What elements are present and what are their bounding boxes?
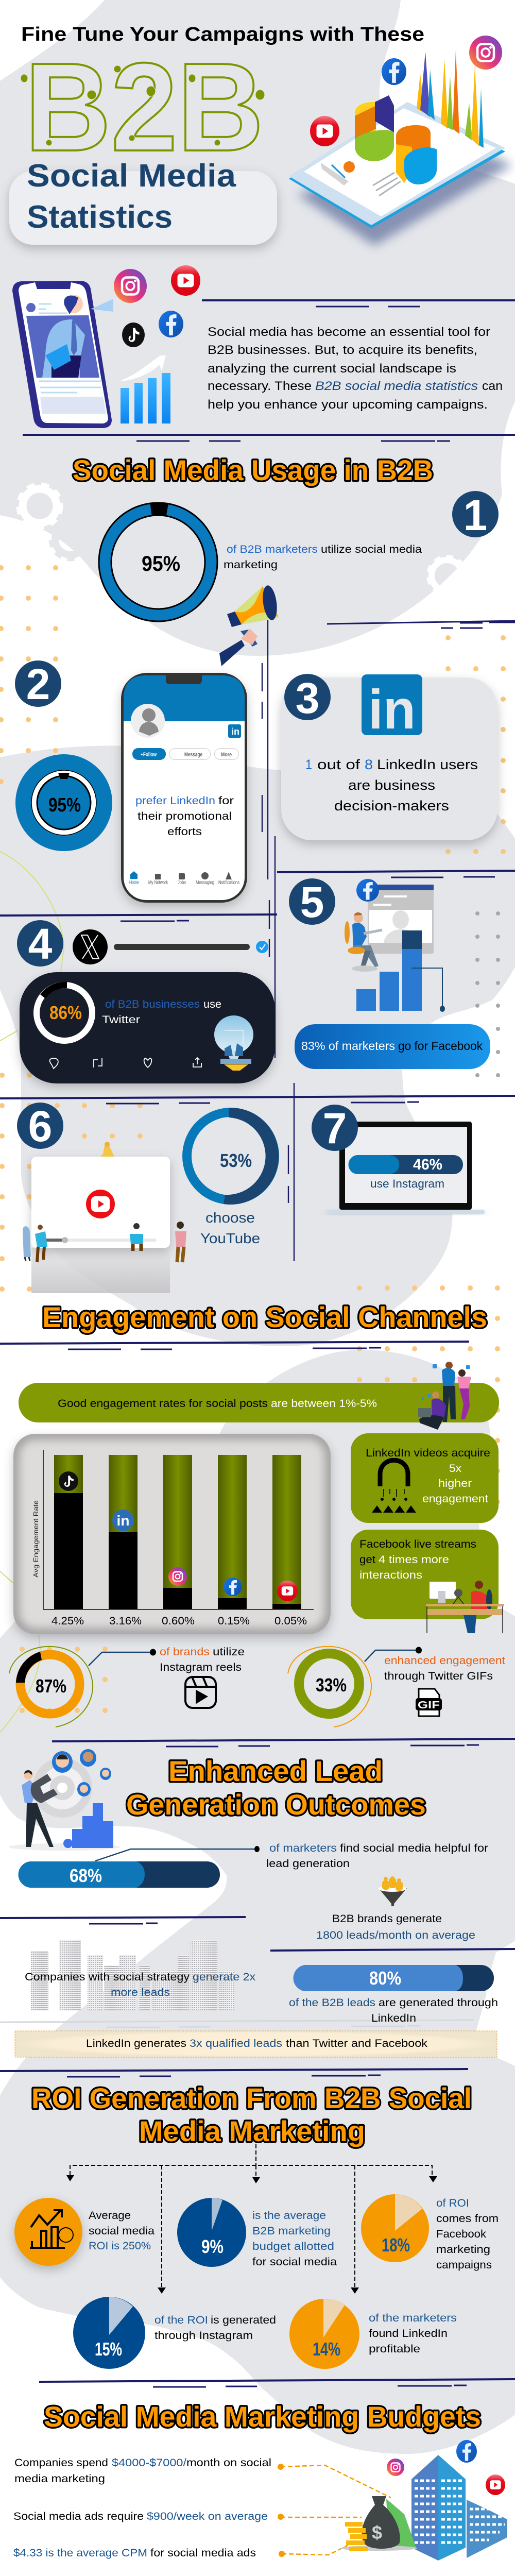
progress pill 46%: 46%	[413, 1156, 442, 1173]
panel text: out of	[317, 757, 360, 772]
panel: LinkedIn videos: 5x	[449, 1463, 462, 1475]
heading: ROI Generation From B2B Social Media Marketing: Media Marketing	[139, 2115, 365, 2147]
phone nav bar	[129, 871, 239, 886]
budget statements	[13, 2457, 271, 2559]
stat: 33% donut	[288, 1647, 371, 1727]
phone text: prefer LinkedIn	[135, 795, 215, 807]
stat: 18% Facebook pie: comes from	[436, 2213, 499, 2225]
stat: ROI 250%: Average	[89, 2210, 131, 2222]
panel text: 1	[305, 757, 312, 772]
dashed connector tree	[66, 2144, 437, 2294]
number 3	[284, 674, 331, 722]
panel: Facebook live streams: 4 times more	[379, 1554, 449, 1566]
heading: Enhanced Lead Generation Outcomes: Enhanced Lead	[168, 1755, 383, 1787]
illustration: buildings and money bag: $	[372, 2522, 382, 2543]
text: brands utilize Instagram reels: utilize	[213, 1646, 245, 1658]
text: brands utilize Instagram reels	[160, 1646, 245, 1673]
stat: 9% budget pie	[177, 2198, 337, 2268]
illustration: gray city skyline	[31, 1940, 234, 2010]
stat: 9% budget pie: is the average	[252, 2210, 326, 2222]
stat: 14% LinkedIn pie	[289, 2299, 457, 2369]
progress pill 80%	[294, 1965, 494, 1991]
illustration: YouTube video card	[23, 1142, 186, 1293]
budget statements: month on social	[186, 2457, 271, 2469]
decorative gears	[19, 485, 466, 594]
illustration: buildings and money bag	[340, 2440, 507, 2561]
bar value labels: 0.15%	[218, 1615, 250, 1627]
connector 87%	[89, 1649, 156, 1666]
stat: 15% Instagram pie: 15%	[95, 2338, 122, 2360]
callout: 83% of marketers	[295, 1024, 490, 1069]
text: marketers find social media helpful: lead generation	[266, 1858, 350, 1870]
profile buttons: Message	[184, 752, 202, 758]
heading: ROI Generation From B2B Social Media Marketing	[31, 2082, 472, 2147]
panel: Facebook live streams	[351, 1530, 504, 1633]
channel icons on bars	[59, 1471, 298, 1601]
illustration: person with magnet attracting leads	[9, 1749, 120, 1851]
heading: Enhanced Lead Generation Outcomes: Generation Outcomes	[126, 1788, 426, 1821]
illustration: Facebook page and marketer	[345, 879, 445, 1012]
text: 80 percent of leads through LinkedIn: LinkedIn	[371, 2012, 416, 2024]
stat: 18% Facebook pie: marketing	[436, 2244, 490, 2256]
text: enhanced engagement: through Twitter GIFs	[384, 1670, 493, 1682]
card text: use	[203, 998, 221, 1010]
avatar	[131, 704, 165, 738]
heading: Engagement on Social Channels: Engagement on Social Channels	[42, 1301, 487, 1333]
intro text: analyzing the current social landscape is	[208, 362, 456, 376]
stat: 18% Facebook pie: 18%	[382, 2234, 410, 2256]
progress pill 68%: 68%	[70, 1865, 102, 1886]
phone text	[135, 795, 234, 838]
text: marketers find social media helpful: find social media helpful for	[340, 1842, 488, 1854]
panel: phone LinkedIn stat	[121, 673, 247, 903]
stat: 9% budget pie: B2B marketing	[252, 2225, 331, 2237]
phone nav bar: Messaging	[196, 880, 214, 886]
text: companies generate 2x more leads: Companies with social strategy	[25, 1971, 190, 1983]
stat: 18% Facebook pie: Facebook	[436, 2228, 487, 2240]
number 1	[452, 491, 499, 539]
intro text: can	[482, 379, 503, 393]
callout: LinkedIn 3x qualified leads	[15, 2031, 497, 2057]
callout: good engagement rates: Good engagement rates for social posts	[58, 1398, 268, 1410]
callout: 83% of marketers: 83% of marketers	[301, 1039, 395, 1053]
callout: good engagement rates: are between 1%-5%	[271, 1398, 377, 1410]
icon: megaphone in hand	[219, 585, 279, 666]
stat: 14% LinkedIn pie: 14%	[313, 2338, 340, 2360]
card text: Twitter	[102, 1014, 140, 1026]
phone nav bar: Home	[129, 880, 139, 886]
bar value labels: 4.25%	[52, 1615, 84, 1627]
title: outlined B2B: B2B	[25, 37, 264, 177]
stat 2: 95% donut: 95%	[48, 794, 81, 816]
illustration: laptop Instagram stat: use Instagram	[370, 1177, 444, 1190]
bar chart	[356, 930, 422, 1011]
stat: 15% Instagram pie	[73, 2297, 276, 2369]
icon: GIF file	[416, 1689, 442, 1716]
intro text: help you enhance your upcoming campaigns.	[208, 398, 488, 412]
panel text: 8	[365, 757, 373, 772]
panel: Facebook live streams: interactions	[359, 1569, 422, 1581]
panel text	[305, 757, 478, 814]
illustration: tablet with charts	[289, 36, 512, 246]
channel icons on bars: in	[117, 1513, 129, 1529]
profile buttons	[132, 748, 239, 760]
heading: Social Media Marketing Budgets: Social Media Marketing Budgets	[44, 2400, 481, 2433]
panel text: LinkedIn users	[377, 757, 478, 772]
callout: LinkedIn 3x qualified leads: LinkedIn generates	[86, 2038, 186, 2049]
text: 80 percent of leads through LinkedIn: are generated through	[379, 1997, 498, 2009]
bar value labels: 3.16%	[109, 1615, 142, 1627]
icon: growth chart	[30, 2210, 73, 2248]
panel text: are business	[348, 777, 435, 793]
stat: 87% donut: 87%	[36, 1675, 66, 1697]
stat: 14% LinkedIn pie: of the marketers	[369, 2312, 457, 2324]
budget statements: $4000-$7000/	[112, 2457, 186, 2469]
illustration: light bulb with team	[214, 1015, 253, 1071]
number 6: 6	[28, 1102, 52, 1150]
illustration: phone with presenter and icons	[12, 265, 200, 428]
phone nav bar: Jobs	[178, 880, 186, 886]
subtitle panel: Social Media Statistics	[9, 158, 277, 245]
stat: 15% Instagram pie: through Instagram	[154, 2330, 253, 2342]
stat 1 text	[224, 544, 422, 571]
86% donut: 86%	[49, 1002, 82, 1023]
text: 1800 leads per month: 1800 leads/month on average	[316, 1929, 475, 1941]
bar value labels	[52, 1615, 307, 1627]
heading: ROI Generation From B2B Social Media Marketing: ROI Generation From B2B Social	[31, 2082, 472, 2114]
dashed connectors to money illustration	[278, 2464, 391, 2557]
text: brands utilize Instagram reels: of brands	[160, 1646, 210, 1658]
profile buttons: +Follow	[141, 752, 157, 758]
text: companies generate 2x more leads: more leads	[111, 1987, 170, 1998]
axis label: Avg Engagement Rate	[32, 1500, 40, 1578]
intro text: necessary. These	[208, 379, 312, 393]
phone text: their promotional	[138, 810, 232, 822]
tweet header: X logo, name bar, verified badge	[73, 929, 268, 964]
text: brands utilize Instagram reels: Instagram reels	[160, 1662, 242, 1673]
card text	[102, 998, 221, 1026]
bar value labels: 0.60%	[162, 1615, 195, 1627]
callout: LinkedIn 3x qualified leads: 3x qualified leads	[190, 2038, 282, 2049]
connector 33%	[365, 1647, 422, 1662]
stat: 9% budget pie: 9%	[201, 2236, 224, 2257]
phone nav bar: My Network	[148, 880, 168, 886]
number 5: 5	[300, 878, 324, 926]
stat 6: 53% donut: 53%	[220, 1150, 252, 1171]
icon: Instagram reels	[185, 1677, 216, 1708]
number 3: 3	[296, 674, 319, 722]
number 2	[15, 660, 61, 708]
number 4	[17, 920, 63, 968]
small linkedin badge	[228, 724, 241, 738]
decorative thin arcs	[0, 852, 64, 1733]
number 2: 2	[26, 660, 50, 708]
number 7	[312, 1104, 358, 1153]
illustration: laptop Instagram stat	[327, 1122, 485, 1214]
stat: 14% LinkedIn pie: profitable	[369, 2343, 420, 2355]
decorative dots	[0, 565, 506, 1713]
tweet action icons	[50, 1058, 201, 1069]
callout: good engagement rates	[19, 1362, 499, 1430]
stat: 9% budget pie: budget allotted	[252, 2241, 334, 2252]
illustration: people with phones	[418, 1362, 471, 1430]
intro text: Social media has become an essential tool for	[208, 325, 490, 339]
text: 80 percent of leads through LinkedIn	[289, 1997, 498, 2024]
86% donut	[37, 982, 92, 1041]
panel text: decision-makers	[334, 798, 449, 814]
panel: Twitter dark card	[20, 972, 275, 1083]
progress pill 46%	[349, 1155, 463, 1174]
icon: LinkedIn: in	[368, 678, 416, 740]
text: 80 percent of leads through LinkedIn: of the B2B leads	[289, 1997, 375, 2009]
stat: ROI 250%: social media	[89, 2225, 154, 2237]
budget statements: Social media ads require	[13, 2511, 144, 2522]
stat: 18% Facebook pie: campaigns	[436, 2259, 492, 2271]
olive column backgrounds	[54, 1455, 301, 1609]
stat 1: 95% donut: 95%	[142, 551, 180, 575]
stat: 15% Instagram pie: of the ROI	[154, 2314, 208, 2326]
stat: ROI 250%: ROI is 250%	[89, 2240, 151, 2252]
text: enhanced engagement: enhanced engagement	[384, 1655, 505, 1667]
connector 68%	[95, 1846, 260, 1861]
stat 1 text: marketing	[224, 559, 278, 571]
panel: bar chart average engagement rate	[13, 1434, 331, 1634]
text: enhanced engagement	[384, 1655, 505, 1682]
number 7: 7	[323, 1104, 347, 1153]
text: 1800 leads per month	[316, 1913, 475, 1941]
subtitle panel: Social Media Statistics: Statistics	[27, 199, 173, 235]
small linkedin badge: in	[231, 726, 239, 737]
phone text: efforts	[167, 826, 202, 838]
card text: of B2B businesses	[105, 998, 200, 1010]
axes	[43, 1450, 314, 1609]
illustration: streamer at desk	[426, 1581, 504, 1633]
heading: Enhanced Lead Generation Outcomes	[126, 1755, 426, 1821]
subtitle panel: Social Media Statistics: Social Media	[27, 158, 236, 194]
panel: LinkedIn videos: higher	[438, 1478, 472, 1489]
stat 1 text: of B2B marketers	[227, 544, 318, 555]
callout: LinkedIn 3x qualified leads: than Twitter and Facebook	[286, 2038, 428, 2049]
stat 6: 53% donut	[187, 1108, 279, 1246]
budget statements: $4.33 is the average CPM	[13, 2547, 147, 2559]
stat: 33% donut: 33%	[316, 1674, 347, 1696]
number 4: 4	[28, 920, 53, 968]
black data bars	[54, 1493, 301, 1609]
stat 1 text: utilize social media	[321, 544, 422, 555]
stat: 18% Facebook pie: of ROI	[436, 2197, 469, 2209]
stat: 18% Facebook pie	[361, 2194, 499, 2271]
panel: 1 out of 8 LinkedIn users	[281, 674, 497, 840]
number 1: 1	[464, 491, 487, 539]
phone nav bar: Notifications	[218, 880, 239, 886]
callout: 83% of marketers: go for Facebook	[398, 1039, 483, 1053]
icon: lead funnel	[379, 1876, 407, 1906]
stat 1: 95% donut	[97, 501, 219, 623]
panel: LinkedIn videos: engagement	[422, 1493, 488, 1505]
budget statements: media marketing	[14, 2473, 105, 2485]
text: companies generate 2x more leads: generate 2x	[193, 1971, 256, 1983]
stat 2: 95% donut	[15, 754, 112, 851]
stat: 9% budget pie: for social media	[252, 2256, 337, 2268]
budget statements: Companies spend	[14, 2457, 108, 2469]
panel: Facebook live streams: Facebook live streams	[359, 1538, 476, 1550]
text: marketers find social media helpful: of marketers	[269, 1842, 337, 1854]
stat: 14% LinkedIn pie: found LinkedIn	[369, 2328, 448, 2340]
panel: LinkedIn videos: LinkedIn videos acquire	[366, 1447, 490, 1459]
text: companies generate 2x more leads	[25, 1971, 256, 1998]
budget statements: for social media ads	[150, 2547, 256, 2559]
panel: LinkedIn videos	[351, 1433, 499, 1523]
stat: ROI 250%	[14, 2198, 154, 2266]
text: marketers find social media helpful	[266, 1842, 488, 1870]
phone text: for	[218, 795, 234, 807]
panel: Facebook live streams: get	[359, 1554, 375, 1566]
stat 6: 53% donut: YouTube	[200, 1230, 260, 1246]
bar value labels: 0.05%	[274, 1615, 307, 1627]
stat: 15% Instagram pie: is generated	[211, 2314, 276, 2326]
intro text	[208, 325, 503, 412]
progress pill 68%	[19, 1861, 220, 1888]
number 5	[289, 878, 335, 926]
stat 6: 53% donut: choose	[205, 1210, 255, 1226]
text: 1800 leads per month: B2B brands generate	[332, 1913, 442, 1925]
budget statements: $900/week on average	[147, 2511, 268, 2522]
heading: Social Media Usage in B2B: Social Media Usage in B2B	[73, 454, 433, 486]
profile buttons: More	[221, 752, 232, 758]
intro text: B2B social media statistics	[315, 379, 478, 393]
progress pill 80%: 80%	[369, 1968, 401, 1989]
icon: GIF file: GIF	[418, 1700, 440, 1711]
intro text: B2B businesses. But, to acquire its benefits,	[208, 343, 477, 357]
stat: 87% donut	[9, 1647, 93, 1727]
icon: magnet attracting people	[372, 1460, 416, 1513]
number 6	[17, 1102, 63, 1150]
title: Fine Tune Your Campaigns with These: Fine Tune Your Campaigns with These	[21, 24, 424, 45]
